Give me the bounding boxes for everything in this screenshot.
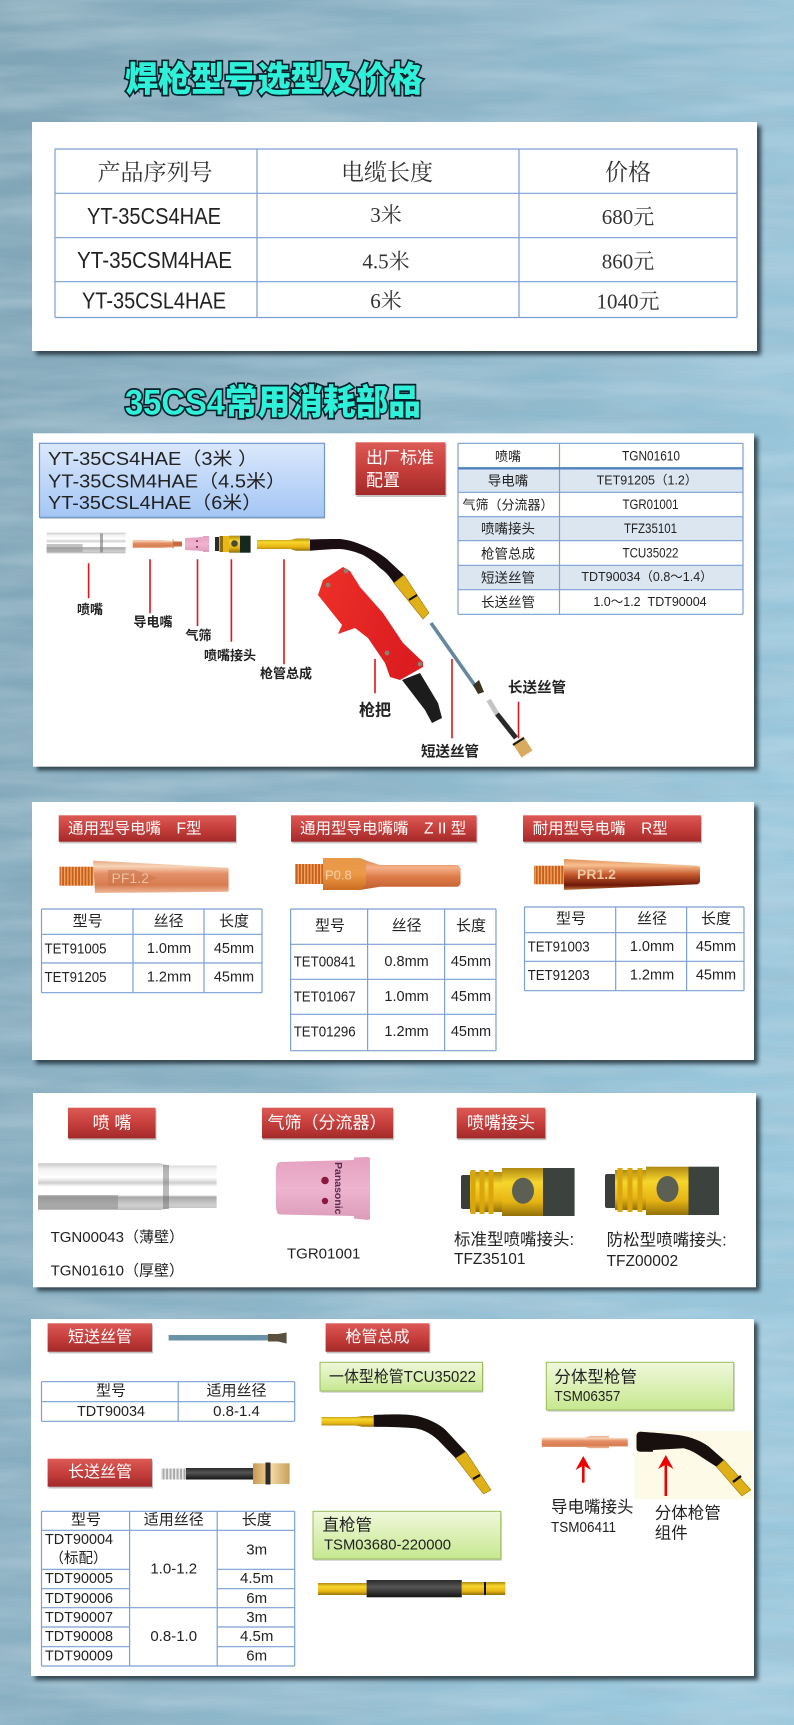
table: type Z II specs: TET00841 — [294, 954, 356, 970]
image: short conduit — [169, 1332, 287, 1344]
panel: price table — [32, 122, 761, 355]
image: long conduit — [161, 1462, 290, 1484]
label: short conduit — [48, 1323, 153, 1353]
label: long conduit — [48, 1459, 153, 1488]
table: type F specs: TET91005 — [44, 940, 106, 958]
table: model, cable length, price — [55, 149, 737, 318]
table: model, cable length, price: 产品序列号 — [98, 160, 212, 185]
arrow: to split tube — [658, 1455, 674, 1496]
split part captions: 分体枪管 — [655, 1503, 721, 1522]
table: model, cable length, price: 860元 — [602, 250, 654, 274]
image: split contact adapter — [542, 1436, 628, 1448]
table: short conduit spec: 0.8-1.4 — [213, 1403, 260, 1420]
image: nozzle — [38, 1163, 217, 1210]
table: type F specs: 1.2mm — [147, 969, 191, 985]
label: split gun tube: 分体型枪管 — [554, 1367, 637, 1386]
image: split gun tube assembly — [634, 1431, 753, 1499]
part numbers: 标准型喷嘴接头: — [454, 1230, 574, 1249]
table: type R specs: 45mm — [696, 968, 736, 984]
part labels: 喷嘴接头 — [204, 648, 256, 663]
table: long conduit specs: （标配） — [50, 1550, 108, 1567]
table: type Z II specs: 1.0mm — [384, 989, 429, 1005]
model list box — [40, 443, 325, 519]
label: gas sieve — [262, 1108, 394, 1140]
label: type F tip: 通用型导电嘴 F型 — [68, 820, 201, 838]
label: nozzle — [68, 1108, 156, 1140]
part: gas sieve — [185, 536, 209, 552]
label: straight gun tube: 直枪管 — [322, 1516, 372, 1535]
part labels: 喷嘴 — [77, 602, 103, 617]
table: type R specs: TET91003 — [528, 938, 590, 956]
table: short conduit spec: 型号 — [96, 1382, 126, 1400]
label: type F tip — [59, 815, 237, 843]
table: long conduit specs: TDT90005 — [45, 1570, 113, 1587]
panel: contact tips — [32, 802, 758, 1064]
table: long conduit specs: 长度 — [242, 1512, 272, 1528]
title: gun model selection and price: 焊枪型号选型及价格 — [125, 60, 423, 100]
table: type R specs — [524, 907, 744, 991]
table: standard parts — [458, 443, 743, 614]
label: gas sieve: 气筛（分流器） — [268, 1114, 386, 1132]
table: short conduit spec — [42, 1382, 295, 1421]
table: model, cable length, price: 4.5米 — [362, 250, 410, 274]
table: type R specs: 1.2mm — [630, 968, 674, 984]
label: short conduit: 短送丝管 — [68, 1328, 132, 1346]
part labels: 短送丝管 — [421, 742, 479, 760]
table: long conduit specs: 6m — [246, 1590, 267, 1607]
part labels: 枪把 — [359, 700, 391, 720]
model list box: YT-35CS4HAE（3米 ） — [48, 449, 258, 469]
table: long conduit specs: TDT90004 — [45, 1531, 113, 1548]
image: gas sieve: Panasonic — [332, 1162, 344, 1215]
image: type Z II tip: P0.8 — [325, 868, 352, 882]
table: type F specs: 丝径 — [154, 913, 184, 930]
table: type F specs — [42, 909, 262, 993]
table: type R specs: TET91203 — [528, 967, 590, 984]
part labels — [77, 602, 566, 760]
table: type Z II specs: 45mm — [451, 989, 491, 1005]
panel: conduits and gun tubes — [31, 1319, 758, 1680]
table: standard parts: 短送丝管 — [481, 570, 535, 586]
part labels: 气筛 — [185, 628, 212, 643]
part: red handle — [318, 567, 442, 723]
table: type Z II specs: 45mm — [451, 954, 491, 970]
table: type F specs: TET91205 — [44, 969, 106, 986]
label: long conduit: 长送丝管 — [68, 1463, 132, 1481]
table: type F specs: 45mm — [214, 941, 254, 957]
label: straight gun tube — [313, 1511, 502, 1561]
label: gun tube assembly: 枪管总成 — [345, 1328, 410, 1346]
table: short conduit spec: TDT90034 — [77, 1403, 145, 1420]
label: type Z II tip: 通用型导电嘴嘴 Z II 型 — [300, 820, 466, 838]
factory standard configuration label: 出厂标准 — [366, 448, 434, 468]
factory standard configuration label: 配置 — [366, 471, 400, 490]
factory standard configuration label — [356, 442, 446, 497]
table: model, cable length, price: 1040元 — [596, 290, 660, 314]
table: model, cable length, price: 6米 — [370, 289, 402, 313]
image: type R tip — [534, 859, 700, 890]
image: type R tip: PR1.2 — [577, 866, 616, 882]
table: type F specs: 45mm — [214, 969, 254, 985]
label: split gun tube: TSM06357 — [554, 1388, 620, 1405]
table: standard parts: TCU35022 — [622, 546, 678, 560]
part: nozzle — [47, 533, 126, 553]
panel: gun exploded diagram — [33, 433, 758, 770]
table: long conduit specs: 3m — [246, 1609, 267, 1626]
label: straight gun tube: TSM03680-220000 — [324, 1536, 451, 1554]
table: long conduit specs: 0.8-1.0 — [150, 1628, 197, 1645]
part labels: 导电嘴 — [133, 614, 173, 630]
part: gun tube assembly — [257, 538, 429, 619]
table: type F specs: 长度 — [219, 913, 249, 930]
table: long conduit specs: TDT90009 — [45, 1648, 113, 1664]
label: integral gun tube: 一体型枪管TCU35022 — [329, 1368, 476, 1386]
table: type R specs: 长度 — [701, 910, 731, 928]
table: long conduit specs: 6m — [246, 1648, 267, 1664]
table: standard parts: 长送丝管 — [481, 595, 535, 610]
table: type Z II specs: 0.8mm — [384, 954, 429, 970]
label: nozzle adapter — [457, 1108, 546, 1140]
panel: nozzle, gas sieve, adapter — [33, 1093, 760, 1291]
table: type Z II specs: 长度 — [456, 918, 486, 934]
label: integral gun tube — [320, 1362, 484, 1393]
part: short conduit — [431, 623, 484, 694]
label: type R tip: 耐用型导电嘴 R型 — [533, 820, 668, 838]
table: long conduit specs: 4.5m — [240, 1628, 273, 1645]
split part captions: TSM06411 — [551, 1519, 616, 1536]
part: nozzle adapter — [215, 536, 251, 553]
part labels: 枪管总成 — [260, 666, 312, 681]
table: long conduit specs: TDT90008 — [45, 1628, 113, 1645]
image: standard adapter — [461, 1168, 575, 1216]
table: standard parts: 1.0～1.2 TDT90004 — [593, 595, 707, 609]
image: type F tip: PF1.2 — [112, 870, 149, 886]
table: type Z II specs: 45mm — [451, 1024, 491, 1040]
table: long conduit specs: 4.5m — [240, 1570, 273, 1587]
table: type F specs: 型号 — [73, 913, 103, 930]
table: standard parts: TET91205（1.2） — [597, 474, 697, 488]
table: model, cable length, price: YT-35CSL4HAE — [82, 288, 226, 314]
part numbers: TGR01001 — [287, 1246, 360, 1262]
image: gas sieve — [276, 1157, 370, 1220]
part labels: 长送丝管 — [508, 679, 566, 697]
table: standard parts: TFZ35101 — [624, 521, 677, 536]
table: model, cable length, price: YT-35CS4HAE — [87, 203, 221, 229]
table: type Z II specs: 1.2mm — [384, 1024, 429, 1040]
table: type R specs: 型号 — [556, 910, 586, 928]
table: standard parts: 气筛（分流器） — [462, 498, 554, 512]
label: split gun tube — [546, 1362, 735, 1412]
table: standard parts: TDT90034（0.8～1.4） — [581, 570, 713, 584]
table: type R specs: 45mm — [696, 939, 736, 955]
table: model, cable length, price: 价格 — [605, 160, 651, 185]
table: long conduit specs: 1.0-1.2 — [150, 1560, 197, 1578]
label: type R tip — [523, 815, 702, 843]
table: long conduit specs: 适用丝径 — [144, 1512, 204, 1528]
arrow: to contact adapter — [576, 1456, 591, 1483]
callout lines — [89, 559, 518, 738]
split part captions: 组件 — [655, 1523, 688, 1542]
image: type F tip — [60, 861, 229, 893]
table: standard parts: 喷嘴 — [495, 449, 521, 464]
table: type Z II specs — [291, 909, 496, 1051]
table: model, cable length, price: 电缆长度 — [341, 160, 433, 185]
heading: 35CS4 common consumables: 35CS4常用消耗部品 — [125, 384, 421, 422]
image: straight gun tube — [318, 1580, 505, 1597]
image: locking adapter — [605, 1167, 719, 1215]
part numbers — [51, 1229, 727, 1280]
table: type F specs: 1.0mm — [147, 941, 191, 957]
table: long conduit specs — [42, 1511, 295, 1666]
table: type R specs: 丝径 — [637, 910, 667, 928]
part: long conduit — [489, 700, 527, 754]
split part captions — [551, 1497, 721, 1542]
table: model, cable length, price: 3米 — [370, 203, 402, 227]
table: long conduit specs: 3m — [246, 1542, 267, 1558]
table: standard parts: TGR01001 — [622, 497, 678, 512]
table: model, cable length, price: YT-35CSM4HAE — [77, 247, 232, 273]
label: gun tube assembly — [326, 1323, 430, 1353]
part numbers: 防松型喷嘴接头: — [607, 1231, 727, 1250]
table: short conduit spec: 适用丝径 — [206, 1382, 267, 1400]
table: type Z II specs: 型号 — [315, 918, 345, 934]
table: type Z II specs: 丝径 — [392, 918, 422, 934]
model list box: YT-35CSL4HAE（6米） — [48, 493, 262, 513]
table: long conduit specs: 型号 — [71, 1512, 101, 1528]
table: type R specs: 1.0mm — [630, 939, 674, 955]
image: type Z II tip — [295, 858, 461, 890]
part numbers: TFZ35101 — [454, 1251, 526, 1268]
table: standard parts: TGN01610 — [622, 448, 680, 464]
model list box: YT-35CSM4HAE（4.5米） — [48, 472, 286, 492]
part numbers: TFZ00002 — [607, 1253, 678, 1270]
table: standard parts: 导电嘴 — [488, 474, 528, 488]
table: standard parts: 喷嘴接头 — [481, 520, 535, 536]
label: nozzle: 喷 嘴 — [93, 1114, 131, 1132]
table: model, cable length, price: 680元 — [602, 205, 654, 229]
table: type Z II specs: TET01296 — [294, 1024, 356, 1040]
split part captions: 导电嘴接头 — [551, 1497, 634, 1516]
label: type Z II tip — [291, 815, 478, 843]
table: long conduit specs: TDT90007 — [45, 1609, 113, 1626]
table: type Z II specs: TET01067 — [294, 988, 356, 1006]
part: contact tip — [133, 540, 182, 548]
label: nozzle adapter: 喷嘴接头 — [467, 1114, 535, 1132]
part numbers: TGN00043（薄壁） — [51, 1229, 184, 1246]
table: standard parts: 枪管总成 — [481, 546, 535, 562]
table: long conduit specs: TDT90006 — [45, 1590, 113, 1607]
image: integral gun tube — [322, 1414, 491, 1494]
part numbers: TGN01610（厚壁） — [51, 1262, 184, 1280]
